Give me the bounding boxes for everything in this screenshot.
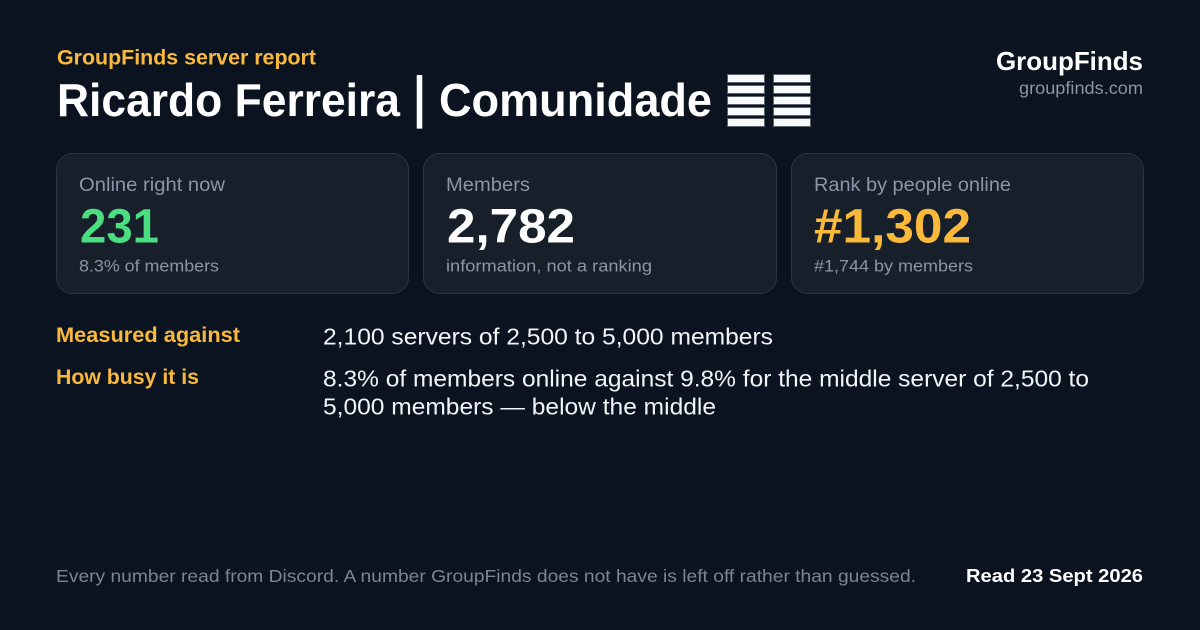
title: | — [414, 65, 426, 129]
row: measured against — [56, 324, 773, 350]
row: measured against: Measured against — [56, 324, 240, 347]
panel: online right now — [56, 154, 408, 294]
panel: members: information, not a ranking — [446, 256, 652, 276]
panel: online right now: 231 — [80, 200, 159, 254]
title: Ricardo Ferreira — [57, 74, 400, 126]
panel: rank by people online — [792, 154, 1144, 294]
panel: online right now: Online right now — [79, 175, 225, 196]
eyebrow heading: GroupFinds server report — [57, 46, 316, 70]
panel: rank by people online: #1,302 — [814, 200, 971, 254]
brand block: groupfinds.com — [1019, 78, 1143, 98]
brand block: GroupFinds — [996, 46, 1143, 76]
panel: rank by people online: #1,744 by members — [814, 256, 973, 276]
row: how busy it is — [56, 366, 1089, 420]
panel: members: 2,782 — [447, 200, 575, 254]
title — [57, 65, 712, 129]
panel: members — [424, 154, 776, 294]
title: Comunidade — [439, 74, 712, 126]
row: how busy it is: 8.3% of members online against 9.8% for the middle server of 2,500 to — [323, 366, 1089, 392]
footer date: Read 23 Sept 2026 — [966, 565, 1143, 586]
panel: online right now: 8.3% of members — [79, 256, 219, 276]
row: how busy it is: How busy it is — [56, 366, 199, 389]
row: how busy it is: 5,000 members — below the middle — [323, 394, 716, 420]
icon: title bar glyphs — [728, 74, 810, 126]
brand block — [996, 46, 1143, 98]
footer note: Every number read from Discord. A number GroupFinds does not have is left off rather than guessed. — [56, 566, 916, 586]
panel: members: Members — [446, 175, 530, 196]
row: measured against: 2,100 servers of 2,500 to 5,000 members — [323, 324, 773, 350]
panel: rank by people online: Rank by people online — [814, 175, 1011, 196]
